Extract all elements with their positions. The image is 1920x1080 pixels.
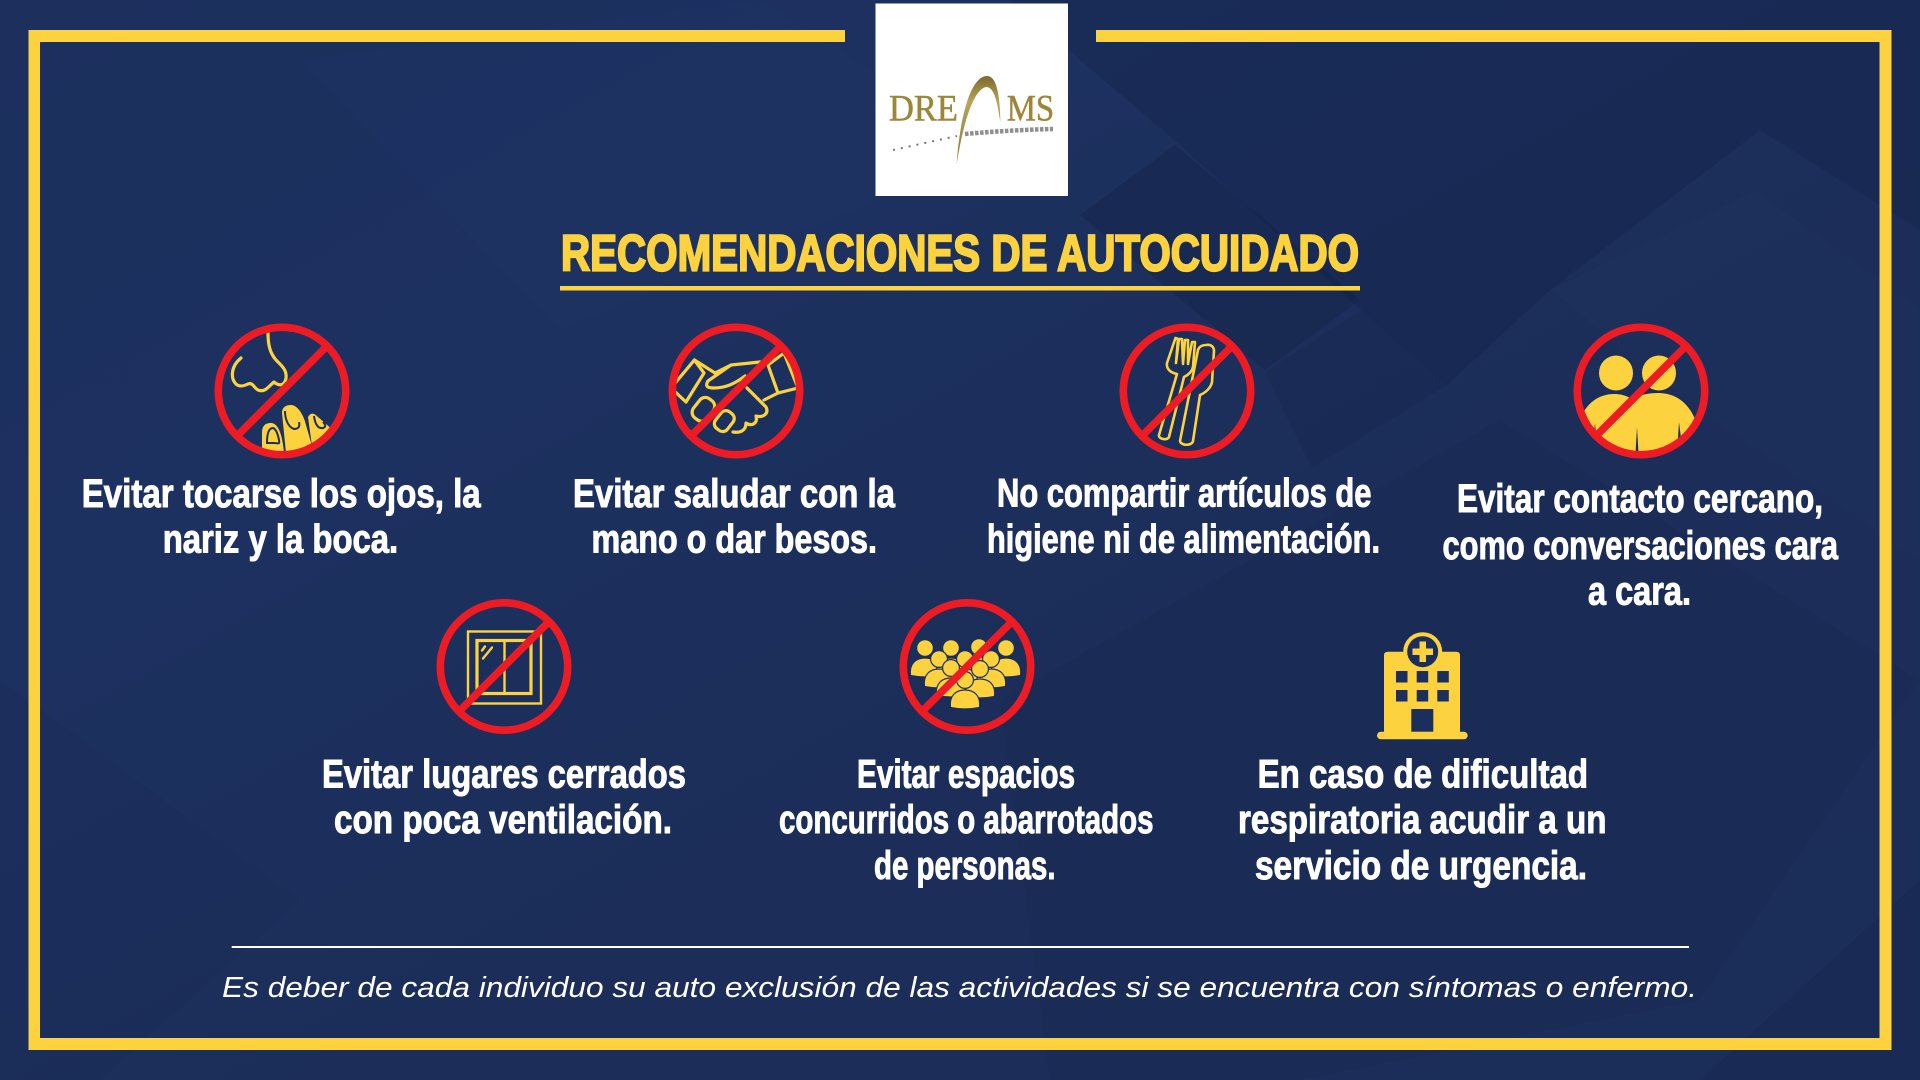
text: respiratory difficulty: servicio de urgencia.	[1255, 844, 1587, 888]
text: respiratory difficulty: En caso de dificultad	[1258, 752, 1588, 796]
logo: Dreams: MS	[1007, 89, 1054, 130]
text: avoid closed places	[322, 752, 686, 842]
footer divider and note: Es deber de cada individuo su auto exclusión de las actividades si se encuentra con síntomas o enfermo.	[222, 972, 1697, 1004]
text: respiratory difficulty	[1238, 752, 1606, 888]
text: avoid closed places: Evitar lugares cerrados	[322, 752, 686, 796]
icon: no sharing cutlery	[1123, 327, 1251, 455]
icon: no handshake	[671, 327, 800, 455]
text: do not share items: No compartir artículos de	[997, 471, 1372, 515]
text: avoid greeting: mano o dar besos.	[592, 518, 877, 562]
icon: hospital	[1377, 632, 1468, 739]
text: avoid greeting: Evitar saludar con la	[573, 472, 896, 516]
text: avoid touching face: nariz y la boca.	[163, 518, 398, 562]
text: do not share items	[987, 471, 1380, 562]
text: avoid crowds: concurridos o abarrotados	[779, 798, 1154, 842]
text: avoid close contact: a cara.	[1588, 570, 1691, 614]
text: respiratory difficulty: respiratoria acudir a un	[1238, 798, 1606, 842]
icon: no closed places	[440, 603, 568, 730]
text: avoid close contact	[1442, 477, 1839, 614]
text: avoid closed places: con poca ventilación.	[334, 798, 672, 842]
text: avoid crowds: de personas.	[874, 844, 1056, 888]
text: avoid close contact: Evitar contacto cercano,	[1457, 477, 1823, 521]
text: avoid touching face: Evitar tocarse los ojos, la	[82, 472, 481, 516]
icon: no touching nose	[218, 327, 346, 455]
title: RECOMENDACIONES DE AUTOCUIDADO	[561, 224, 1359, 282]
logo: Dreams	[876, 4, 1068, 196]
icon: no crowds	[903, 603, 1031, 730]
text: avoid crowds	[779, 752, 1154, 888]
text: avoid greeting	[573, 472, 896, 562]
logo: Dreams: DRE	[889, 89, 958, 130]
text: avoid crowds: Evitar espacios	[857, 752, 1075, 796]
text: avoid touching face	[82, 472, 481, 562]
text: do not share items: higiene ni de alimentación.	[987, 518, 1380, 562]
icon: no close contact	[1577, 327, 1705, 455]
